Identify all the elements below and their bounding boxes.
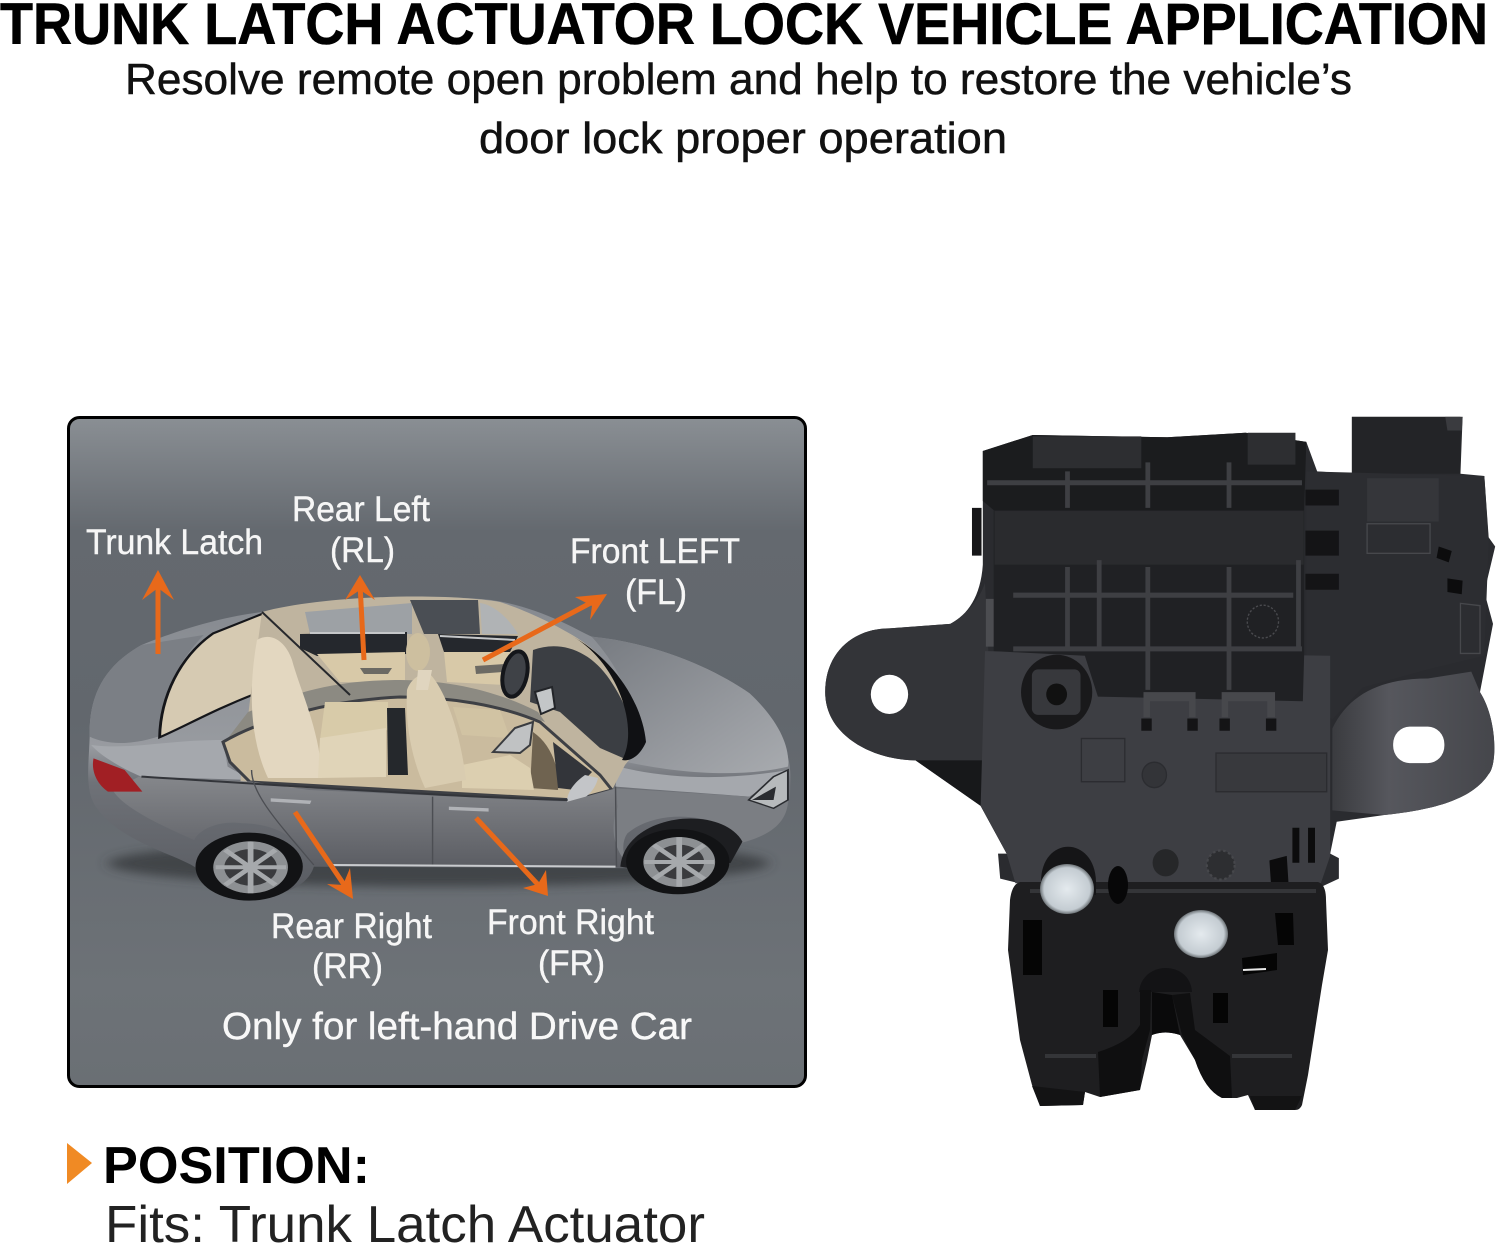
console bbox=[493, 722, 533, 753]
note: left-hand drive: Only for left-hand Drive Car bbox=[222, 1006, 692, 1048]
hood bbox=[592, 637, 788, 773]
left knob tab bbox=[972, 508, 982, 556]
label: rear left: Rear Left bbox=[292, 490, 430, 529]
door panels bbox=[317, 652, 510, 685]
latch highlights bbox=[1030, 891, 1316, 1056]
belt line bbox=[141, 777, 568, 800]
icon: orange triangle marker bbox=[67, 1143, 92, 1184]
mounting bracket bbox=[825, 417, 1495, 888]
illustration: car cutaway bbox=[88, 597, 791, 901]
debossed marks bbox=[1081, 524, 1480, 792]
square slots bbox=[1269, 546, 1463, 892]
cabin interior bbox=[223, 597, 646, 804]
left ear bbox=[825, 583, 994, 760]
vent bbox=[535, 687, 555, 714]
windshield arc bbox=[568, 634, 646, 760]
right ear plate bbox=[1332, 672, 1494, 815]
latch slots bbox=[1023, 913, 1294, 1027]
center plate bbox=[981, 651, 1330, 888]
car shell bbox=[88, 597, 791, 896]
front seat back bbox=[407, 674, 466, 788]
shoulder highlights bbox=[91, 740, 788, 797]
C pillar line bbox=[262, 612, 350, 695]
front belt bbox=[438, 634, 518, 652]
label: front left: (FL) bbox=[625, 573, 687, 612]
chrome belt lines bbox=[310, 633, 515, 640]
front wheel bbox=[626, 829, 730, 894]
clips bbox=[1143, 692, 1275, 717]
cover flat panel bbox=[995, 511, 1304, 565]
side window interior bbox=[223, 697, 612, 800]
latch base bbox=[1008, 847, 1328, 1110]
throat notch bbox=[1139, 968, 1192, 992]
dark foot area bbox=[553, 742, 592, 790]
left grey tab bbox=[986, 599, 1002, 647]
side mirror bbox=[567, 775, 598, 804]
trunk panel bbox=[90, 635, 204, 743]
cabin base bbox=[240, 597, 645, 800]
top cover bbox=[983, 433, 1306, 510]
slot highlight bbox=[1243, 969, 1266, 970]
rear seat upper cushion bbox=[320, 702, 388, 740]
main cover bbox=[994, 510, 1304, 701]
rear belt bbox=[300, 632, 407, 656]
headlight bbox=[749, 770, 788, 808]
panel background bbox=[68, 418, 806, 1086]
label: front right: (FR) bbox=[538, 944, 605, 983]
front cushion bbox=[462, 755, 534, 790]
guide slot bbox=[1108, 866, 1128, 904]
heading: position: POSITION: bbox=[103, 1137, 370, 1195]
label: trunk latch: Trunk Latch bbox=[86, 523, 263, 562]
dashboard bbox=[530, 646, 632, 758]
rear seat back bbox=[252, 637, 322, 778]
label: rear right bbox=[271, 907, 432, 986]
car body bbox=[88, 597, 791, 896]
front glass bbox=[480, 603, 518, 634]
arrow: trunk latch bbox=[142, 570, 174, 654]
subtitle: Resolve remote open problem and help to restore the vehicle’s bbox=[125, 55, 1352, 104]
lower lip bbox=[1032, 1086, 1302, 1110]
right housing bbox=[1306, 471, 1489, 719]
rear wheel bbox=[196, 833, 303, 901]
latch housing bbox=[1008, 882, 1328, 1110]
label: rear left: (RL) bbox=[330, 531, 395, 570]
small screws bbox=[1153, 849, 1235, 880]
arrow: front right bbox=[476, 818, 548, 896]
arrow: rear right bbox=[295, 812, 353, 899]
footwell bbox=[530, 732, 558, 790]
clip slots bbox=[1141, 490, 1339, 731]
upper rivet bbox=[1040, 847, 1096, 914]
actuator body bbox=[825, 417, 1495, 892]
label: rear right: (RR) bbox=[312, 947, 383, 986]
lower doors bbox=[113, 777, 630, 867]
arrow: rear left bbox=[345, 575, 375, 660]
subtitle bbox=[125, 55, 1352, 163]
label: front right bbox=[487, 903, 654, 983]
label: rear right: Rear Right bbox=[271, 907, 432, 946]
left jaw bbox=[1098, 990, 1151, 1097]
right jaw bbox=[1172, 993, 1232, 1098]
car shadow bbox=[108, 840, 769, 887]
cover ribs bbox=[987, 462, 1302, 690]
label: front right: Front Right bbox=[487, 903, 654, 942]
headlight lens bbox=[752, 787, 776, 800]
subtitle: door lock proper operation bbox=[479, 114, 1007, 163]
front arch bbox=[620, 819, 742, 868]
door controls bbox=[360, 664, 505, 674]
center tunnel bbox=[387, 708, 408, 775]
knob bbox=[1021, 655, 1092, 729]
rear glass bbox=[305, 603, 412, 634]
label: rear left bbox=[292, 490, 430, 570]
rear seat lower cushion bbox=[318, 728, 386, 778]
door handles bbox=[271, 798, 489, 812]
rear window bbox=[160, 613, 276, 737]
top raised strip bbox=[1033, 433, 1295, 468]
front quarter bbox=[613, 788, 788, 867]
panel: door lock positions bbox=[68, 418, 806, 1086]
product: trunk latch actuator bbox=[825, 417, 1495, 1110]
door seams bbox=[252, 770, 616, 867]
lower left bracket bbox=[916, 760, 1007, 854]
lower rivet bbox=[1174, 910, 1228, 958]
steering wheel bbox=[498, 649, 532, 699]
seat pillar bbox=[416, 670, 432, 690]
label: front left bbox=[570, 532, 740, 612]
mounting holes bbox=[871, 675, 908, 714]
roof rail band bbox=[228, 680, 545, 738]
right housing raised block bbox=[1367, 478, 1439, 521]
connector bbox=[1352, 417, 1463, 474]
label: front left: Front LEFT bbox=[570, 532, 740, 571]
sill chrome bbox=[333, 865, 616, 867]
front headrest bbox=[406, 633, 430, 671]
throat center bbox=[1152, 992, 1180, 1035]
sunroof bbox=[410, 600, 480, 634]
arrow: front left bbox=[483, 594, 607, 660]
far front seat bbox=[453, 707, 510, 738]
lower body and wheels bbox=[93, 758, 788, 901]
taillight bbox=[93, 758, 142, 792]
